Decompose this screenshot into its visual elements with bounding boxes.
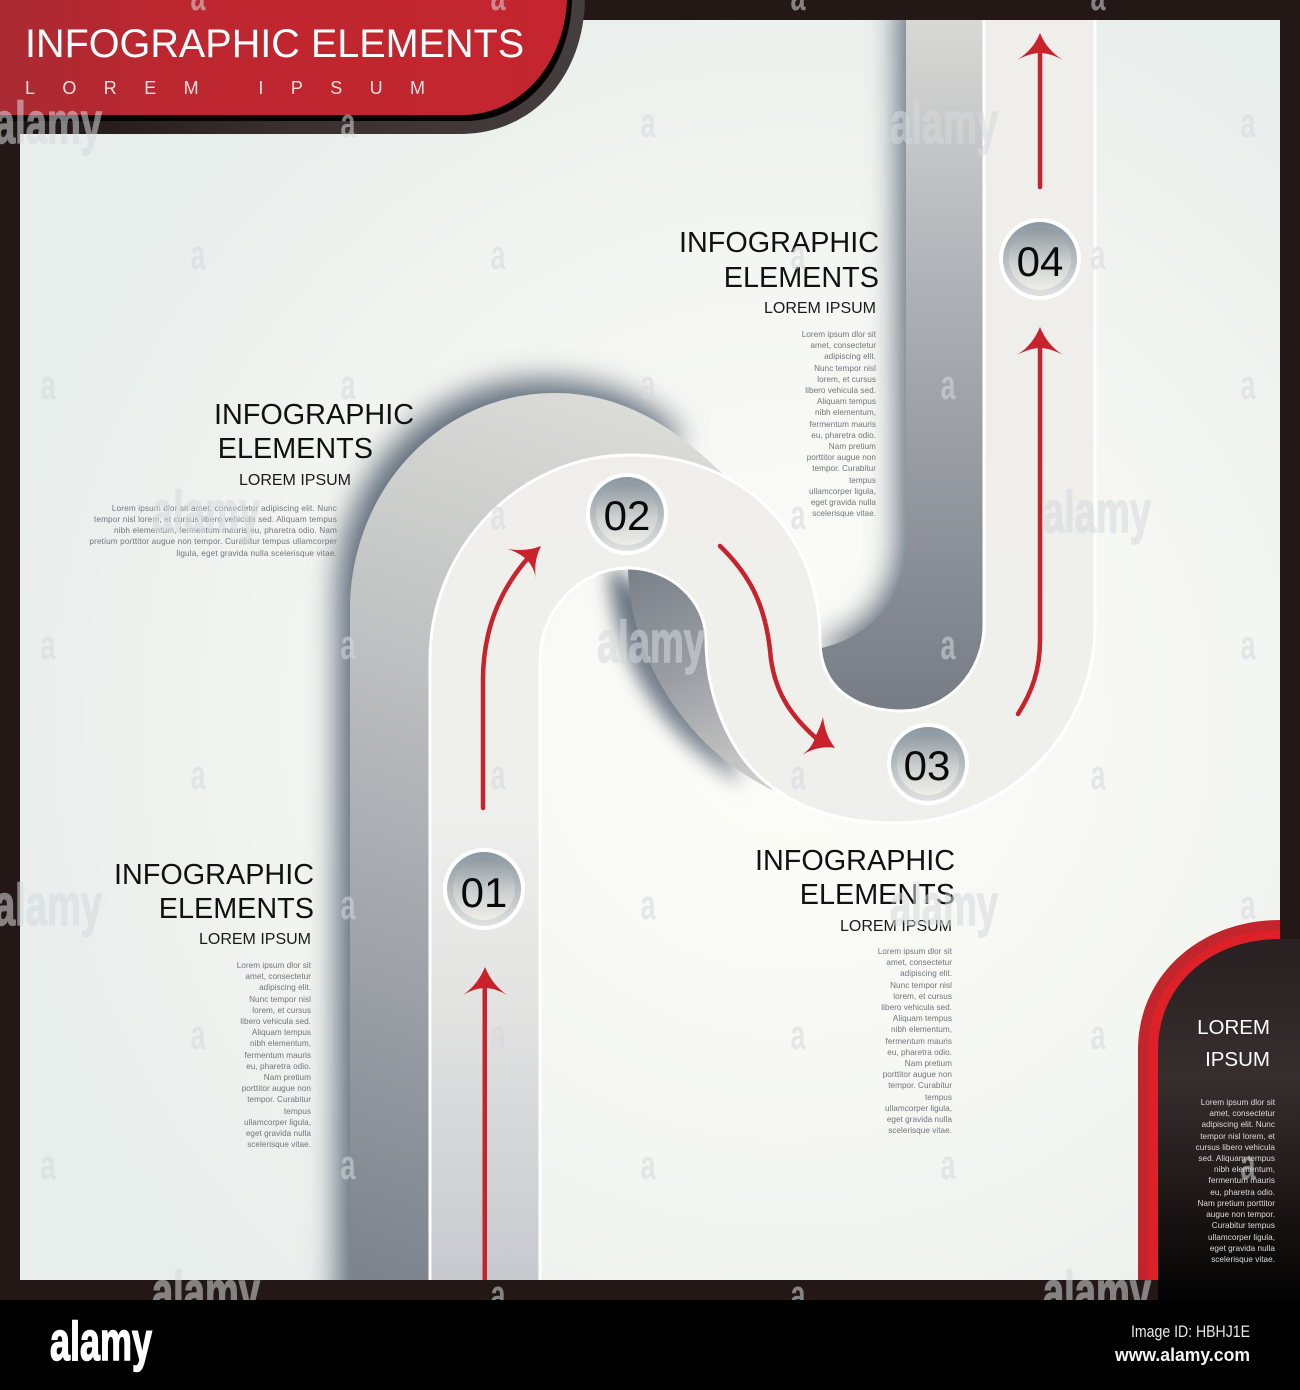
corner panel: lorem ipsum: augue non tempor. — [1206, 1210, 1275, 1219]
corner panel: lorem ipsum: ullamcorper ligula, — [1208, 1233, 1275, 1242]
text block: step 04: INFOGRAPHIC — [679, 227, 879, 259]
footer bar: www.alamy.com — [1114, 1345, 1250, 1365]
watermark pattern: a — [640, 881, 656, 928]
text block: step 04: Nunc tempor nisl — [814, 364, 876, 373]
watermark pattern: alamy — [890, 873, 998, 938]
text block: step 04: Nam pretium — [829, 442, 876, 451]
corner panel: lorem ipsum: amet, consectetur — [1209, 1109, 1275, 1118]
watermark pattern: a — [940, 621, 956, 668]
text block: step 04: tempor. Curabitur — [812, 464, 876, 473]
text block: step 01: libero vehicula sed. — [240, 1017, 311, 1026]
watermark pattern: a — [490, 751, 506, 798]
text block: step 03: porttitor augue non — [883, 1070, 952, 1079]
corner panel: lorem ipsum: nibh elementum, — [1214, 1165, 1275, 1174]
watermark pattern: a — [40, 621, 56, 668]
footer bar: Image ID: HBHJ1E — [1131, 1322, 1250, 1341]
text block: step 01 — [114, 859, 314, 1149]
text block: step 02: pretium porttitor augue non tempor. Curabitur tempus ullamcorper — [89, 537, 337, 546]
watermark pattern: a — [340, 99, 356, 146]
watermark pattern: a — [1240, 621, 1256, 668]
text block: step 04: LOREM IPSUM — [764, 300, 876, 317]
watermark pattern: a — [790, 1271, 806, 1318]
watermark pattern: a — [790, 751, 806, 798]
text block: step 01: scelerisque vitae. — [247, 1140, 311, 1149]
text block: step 01: amet, consectetur — [245, 972, 311, 981]
text block: step 03: libero vehicula sed. — [881, 1003, 952, 1012]
text block: step 01: tempus — [284, 1107, 311, 1116]
watermark pattern: a — [1090, 231, 1106, 278]
badge 02: 02 — [604, 492, 650, 539]
watermark pattern: a — [790, 1011, 806, 1058]
watermark pattern: a — [340, 621, 356, 668]
corner panel: lorem ipsum: cursus libero vehicula — [1196, 1143, 1275, 1152]
corner panel: lorem ipsum: Curabitur tempus — [1212, 1221, 1275, 1230]
text block: step 04: ELEMENTS — [724, 262, 879, 294]
back band: right column with shadow — [800, 0, 990, 730]
watermark pattern: a — [190, 1011, 206, 1058]
watermark pattern: a — [40, 1141, 56, 1188]
text block: step 04: tempus — [849, 476, 876, 485]
corner panel: lorem ipsum: eu, pharetra odio. — [1210, 1188, 1275, 1197]
watermark pattern: a — [640, 1141, 656, 1188]
text block: step 01: INFOGRAPHIC — [114, 859, 314, 891]
text block: step 04: porttitor augue non — [807, 453, 876, 462]
text block: step 01: Nunc tempor nisl — [249, 995, 311, 1004]
text block: step 01: eget gravida nulla — [246, 1129, 311, 1138]
text block: step 02 — [89, 399, 414, 558]
text block: step 03 — [755, 845, 955, 1135]
text block: step 01: tempor. Curabitur — [247, 1095, 311, 1104]
watermark pattern: a — [40, 361, 56, 408]
text block: step 01: fermentum mauris — [245, 1051, 311, 1060]
title banner: INFOGRAPHIC ELEMENTS — [25, 22, 524, 66]
text block: step 03: Aliquam tempus — [893, 1014, 952, 1023]
watermark pattern: alamy — [152, 480, 260, 545]
text block: step 03: INFOGRAPHIC — [755, 845, 955, 877]
watermark pattern: a — [790, 231, 806, 278]
text block: step 01: ELEMENTS — [159, 893, 314, 925]
arrow 1 — [463, 967, 507, 1285]
watermark pattern: a — [490, 1011, 506, 1058]
text block: step 03: nibh elementum, — [891, 1025, 952, 1034]
corner panel: lorem ipsum: eget gravida nulla — [1210, 1244, 1275, 1253]
text block: step 04: nibh elementum, — [815, 408, 876, 417]
text block: step 01: porttitor augue non — [242, 1084, 311, 1093]
watermark pattern: a — [1240, 1141, 1256, 1188]
watermark pattern: a — [1240, 361, 1256, 408]
corner panel: lorem ipsum: tempor nisl lorem, et — [1200, 1132, 1276, 1141]
text block: step 03: Nunc tempor nisl — [890, 981, 952, 990]
corner panel: lorem ipsum — [1138, 920, 1300, 1300]
badge 03 — [887, 723, 969, 805]
corner panel: lorem ipsum: Nam pretium porttitor — [1197, 1199, 1275, 1208]
text block: step 02: Lorem ipsum dlor sit amet, consectetur adipiscing elit. Nunc — [112, 504, 337, 513]
watermark pattern: alamy — [1043, 480, 1151, 545]
text block: step 03: adipiscing elit. — [900, 969, 952, 978]
text block: step 02: ligula, eget gravida nulla scelerisque vitae. — [176, 549, 337, 558]
text block: step 04: Aliquam tempus — [817, 397, 876, 406]
watermark pattern: alamy — [597, 610, 705, 675]
text block: step 04: Lorem ipsum dlor sit — [802, 330, 877, 339]
badge 02 — [586, 473, 668, 555]
watermark pattern: a — [340, 1141, 356, 1188]
text block: step 04: libero vehicula sed. — [805, 386, 876, 395]
back band: left arch with shadow — [337, 380, 738, 1327]
watermark pattern: a — [640, 361, 656, 408]
watermark pattern: a — [640, 99, 656, 146]
watermark pattern: a — [190, 231, 206, 278]
text block: step 01: LOREM IPSUM — [199, 931, 311, 948]
text block: step 01: Nam pretium — [264, 1073, 311, 1082]
text block: step 03: eget gravida nulla — [887, 1115, 952, 1124]
text block: step 02: INFOGRAPHIC — [214, 399, 414, 431]
text block: step 02: tempor nisl lorem, et cursus libero vehicula sed. Aliquam tempus — [94, 515, 337, 524]
watermark pattern: a — [340, 361, 356, 408]
corner panel: lorem ipsum: fermentum mauris — [1209, 1176, 1275, 1185]
text block: step 03: fermentum mauris — [886, 1037, 952, 1046]
watermark pattern: a — [1090, 1011, 1106, 1058]
watermark pattern: a — [940, 361, 956, 408]
watermark pattern: a — [1240, 881, 1256, 928]
text block: step 03: ELEMENTS — [800, 879, 955, 911]
corner panel: lorem ipsum: scelerisque vitae. — [1211, 1255, 1275, 1264]
arrow 2 — [483, 546, 541, 808]
text block: step 01: Aliquam tempus — [252, 1028, 311, 1037]
text block: step 03: eu, pharetra odio. — [887, 1048, 952, 1057]
arrow 4 — [1017, 327, 1063, 714]
watermark pattern: alamy — [1043, 1260, 1151, 1325]
title banner — [0, 0, 585, 134]
corner panel: lorem ipsum: IPSUM — [1205, 1048, 1270, 1071]
badge 01: 01 — [461, 869, 507, 916]
text block: step 01: Lorem ipsum dlor sit — [237, 961, 312, 970]
corner panel: lorem ipsum: sed. Aliquam tempus — [1198, 1154, 1275, 1163]
watermark pattern: a — [490, 1271, 506, 1318]
text block: step 01: nibh elementum, — [250, 1039, 311, 1048]
text block: step 04: scelerisque vitae. — [812, 509, 876, 518]
text block: step 04 — [679, 227, 879, 518]
watermark pattern: a — [190, 751, 206, 798]
corner panel: lorem ipsum: LOREM — [1197, 1016, 1270, 1039]
text block: step 04: eget gravida nulla — [811, 498, 876, 507]
watermark pattern: alamy — [890, 91, 998, 156]
text block: step 04: adipiscing elit. — [824, 352, 876, 361]
white ribbon path — [430, 15, 1095, 1285]
text block: step 03: ullamcorper ligula, — [885, 1104, 952, 1113]
text block: step 03: Lorem ipsum dlor sit — [878, 947, 953, 956]
text block: step 03: tempus — [925, 1093, 952, 1102]
text block: step 03: scelerisque vitae. — [888, 1126, 952, 1135]
watermark pattern: a — [490, 491, 506, 538]
corner panel: lorem ipsum: Lorem ipsum dlor sit — [1201, 1098, 1276, 1107]
watermark pattern: a — [1240, 99, 1256, 146]
back band: curled pocket under step 02 — [609, 563, 772, 790]
text block: step 03: tempor. Curabitur — [888, 1081, 952, 1090]
badge 04: 04 — [1017, 238, 1063, 285]
badge 01 — [443, 848, 525, 930]
text block: step 04: ullamcorper ligula, — [809, 487, 876, 496]
text block: step 04: eu, pharetra odio. — [811, 431, 876, 440]
arrow 3 — [720, 546, 835, 755]
text block: step 01: ullamcorper ligula, — [244, 1118, 311, 1127]
text block: step 03: Nam pretium — [905, 1059, 952, 1068]
text block: step 04: lorem, et cursus — [817, 375, 876, 384]
text block: step 01: eu, pharetra odio. — [246, 1062, 311, 1071]
text block: step 04: amet, consectetur — [810, 341, 876, 350]
footer bar: alamy — [50, 1310, 152, 1372]
watermark pattern: a — [790, 491, 806, 538]
title banner: LOREM IPSUM — [25, 78, 452, 98]
badge 04 — [999, 218, 1081, 300]
badge 03: 03 — [904, 742, 950, 789]
watermark pattern: a — [1090, 751, 1106, 798]
text block: step 03: LOREM IPSUM — [840, 918, 952, 935]
watermark pattern: a — [340, 881, 356, 928]
watermark pattern: alamy — [152, 1260, 260, 1325]
text block: step 03: lorem, et cursus — [893, 992, 952, 1001]
arrow 5 — [1017, 33, 1063, 187]
text block: step 03: amet, consectetur — [886, 958, 952, 967]
footer bar — [0, 1300, 1300, 1390]
text block: step 04: fermentum mauris — [810, 420, 876, 429]
watermark pattern: a — [940, 1141, 956, 1188]
text block: step 02: LOREM IPSUM — [239, 472, 351, 489]
corner panel: lorem ipsum: adipiscing elit. Nunc — [1202, 1120, 1275, 1129]
text block: step 02: nibh elementum, fermentum mauris eu, pharetra odio. Nam — [114, 526, 337, 535]
text block: step 01: lorem, et cursus — [252, 1006, 311, 1015]
text block: step 02: ELEMENTS — [218, 433, 373, 465]
text block: step 01: adipiscing elit. — [259, 983, 311, 992]
watermark pattern: a — [490, 231, 506, 278]
